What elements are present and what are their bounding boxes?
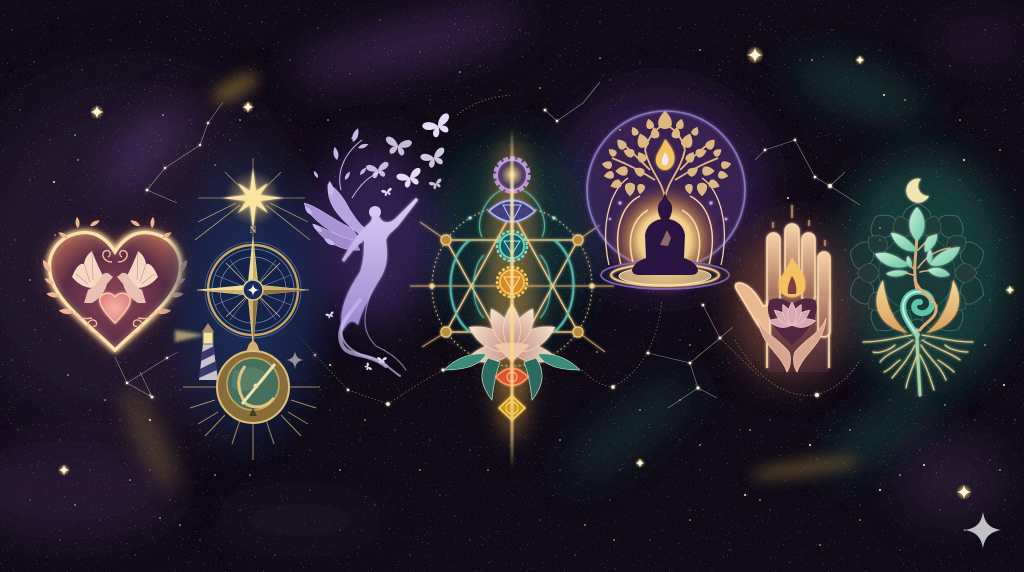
- palm edges: [767, 300, 829, 368]
- geometry nodes: [430, 216, 594, 337]
- flowing dress: [340, 290, 406, 376]
- roots: [863, 330, 973, 395]
- navy backdrop: [158, 130, 342, 470]
- heart halo: [50, 233, 180, 350]
- crescent moon: [906, 179, 929, 203]
- icon: tree of life with moon, mandala and roots: [846, 179, 988, 395]
- icon: rising fairy with butterflies: [303, 112, 455, 376]
- icon: chakra column with sacred geometry and lotus: [410, 128, 614, 468]
- icon: corner sparkle: [965, 512, 1001, 548]
- moon cradle crescents: [876, 280, 959, 333]
- wings: [304, 184, 370, 250]
- heart outline: [50, 233, 180, 350]
- root chakra: [499, 396, 525, 420]
- fingers: [767, 224, 830, 337]
- light beam: [510, 128, 514, 468]
- seedling stem: [888, 232, 950, 290]
- palm flame: [779, 257, 805, 297]
- lotus flower: [465, 305, 559, 366]
- branches: [612, 124, 718, 198]
- astrolabe rays: [183, 387, 320, 460]
- mudra hand: [660, 230, 671, 246]
- leaves: [875, 207, 960, 277]
- constellation lines: [115, 82, 860, 408]
- fairy figure: [341, 198, 418, 332]
- swirls: [76, 251, 154, 335]
- sacral chakra: [496, 368, 528, 386]
- sparkle stars: [58, 46, 1015, 500]
- vine leaves: [41, 217, 189, 315]
- north label: N: [250, 225, 257, 235]
- aura ring: [587, 111, 745, 269]
- vine: [340, 140, 380, 198]
- compass dial: [205, 242, 301, 338]
- mandala: [846, 203, 988, 343]
- butterflies: [325, 112, 455, 372]
- central glow: [488, 140, 536, 440]
- sacred geometry: [410, 190, 614, 366]
- astrolabe: [217, 340, 289, 423]
- palm lotus: [768, 302, 816, 329]
- dark heart palm: [768, 298, 817, 345]
- small heart: [100, 293, 130, 323]
- spiral trunk: [903, 280, 936, 335]
- concentric arcs: [606, 178, 724, 265]
- central glow: [607, 182, 723, 298]
- lighthouse: [175, 323, 218, 380]
- icon: open hand with flame and lotus: [733, 205, 837, 377]
- right dove: [117, 251, 158, 303]
- compass rose: [197, 237, 309, 345]
- north star: [195, 158, 310, 245]
- throat chakra: [497, 231, 527, 261]
- icon: compass with north star, lighthouse and astrolabe: [158, 130, 342, 470]
- fairy glow: [313, 145, 437, 325]
- leaves: [303, 127, 369, 247]
- meditating silhouette: [632, 193, 698, 275]
- cupped hands: [758, 318, 826, 372]
- aura dots: [609, 201, 727, 220]
- finger flame tips: [773, 205, 825, 246]
- icon: glowing heart with doves: [41, 217, 189, 350]
- small compass star: [286, 351, 304, 369]
- constellation nodes: [126, 109, 832, 406]
- tree leaves: [601, 111, 732, 196]
- icon: meditating figure under tree of light: [587, 111, 745, 298]
- hand halo: [733, 233, 837, 377]
- crown chakra: [495, 158, 529, 192]
- third eye chakra: [489, 200, 535, 222]
- solar plexus chakra: [497, 267, 527, 297]
- fairy head: [369, 206, 381, 218]
- flame: [656, 139, 675, 170]
- palm: [767, 296, 829, 372]
- thumb: [736, 283, 770, 340]
- water ripple base: [601, 261, 729, 289]
- left dove: [72, 251, 113, 303]
- lotus leaves: [444, 354, 580, 400]
